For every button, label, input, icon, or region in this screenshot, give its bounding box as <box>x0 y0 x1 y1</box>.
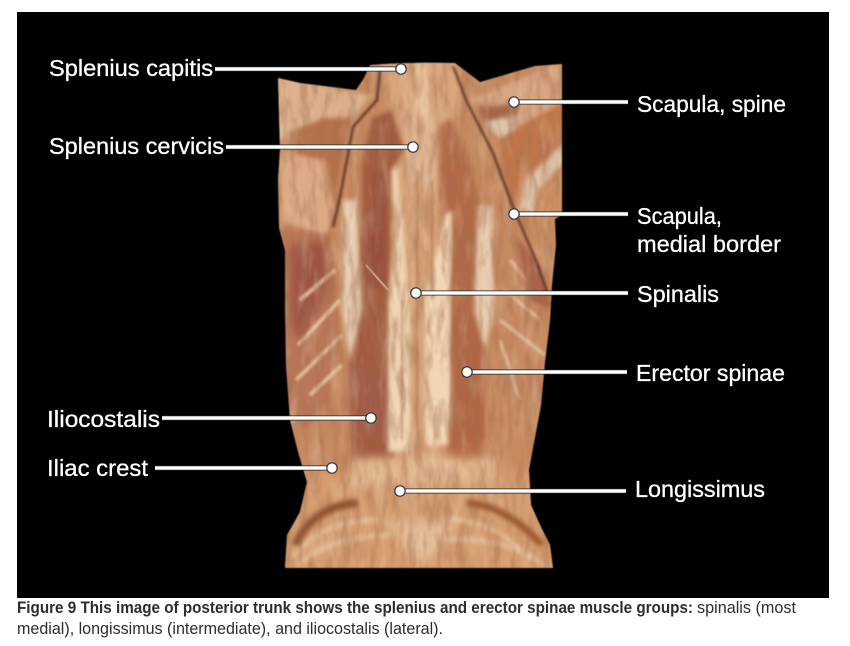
figure caption: spinalis (most <box>697 599 796 617</box>
label: Longissimus: Longissimus <box>635 476 765 502</box>
figure caption <box>17 599 796 638</box>
label: Scapula, medial border <box>509 203 781 257</box>
label: Splenius cervicis: Splenius cervicis <box>49 133 224 159</box>
label: Iliocostalis: Iliocostalis <box>47 406 160 432</box>
label: Splenius capitis: Splenius capitis <box>49 55 213 81</box>
figure caption: Figure 9 This image of posterior trunk shows the splenius and erector spinae muscle groups: <box>17 599 693 617</box>
creases along scapulae <box>333 70 380 227</box>
lumbar and pelvis <box>280 470 560 575</box>
muscle grain <box>278 60 568 570</box>
label: Scapula, spine <box>509 91 786 117</box>
label: Erector spinae <box>462 360 785 386</box>
label: Spinalis: Spinalis <box>637 281 719 307</box>
figure caption: medial), longissimus (intermediate), and iliocostalis (lateral). <box>17 620 443 638</box>
upper shoulders <box>278 78 372 141</box>
dark muscle columns <box>350 110 404 462</box>
label: Erector spinae: Erector spinae <box>636 360 785 386</box>
neck and midline <box>378 60 465 470</box>
label: Scapula, spine: Scapula, spine <box>637 91 786 117</box>
label: Iliac crest: Iliac crest <box>47 455 149 481</box>
label: Longissimus <box>395 476 765 502</box>
label: Iliocostalis <box>47 406 376 432</box>
anatomical specimen: posterior trunk <box>270 55 570 575</box>
label: Scapula, medial border: medial border <box>637 231 781 257</box>
label: Scapula, medial border: Scapula, <box>637 203 722 229</box>
dark pelvic arcs <box>295 503 358 545</box>
rib zones <box>280 228 340 430</box>
label: Splenius cervicis <box>49 133 418 159</box>
label: Splenius capitis <box>49 55 406 81</box>
label: Spinalis <box>411 281 719 307</box>
tendons <box>388 165 412 452</box>
label: Iliac crest <box>47 455 337 481</box>
